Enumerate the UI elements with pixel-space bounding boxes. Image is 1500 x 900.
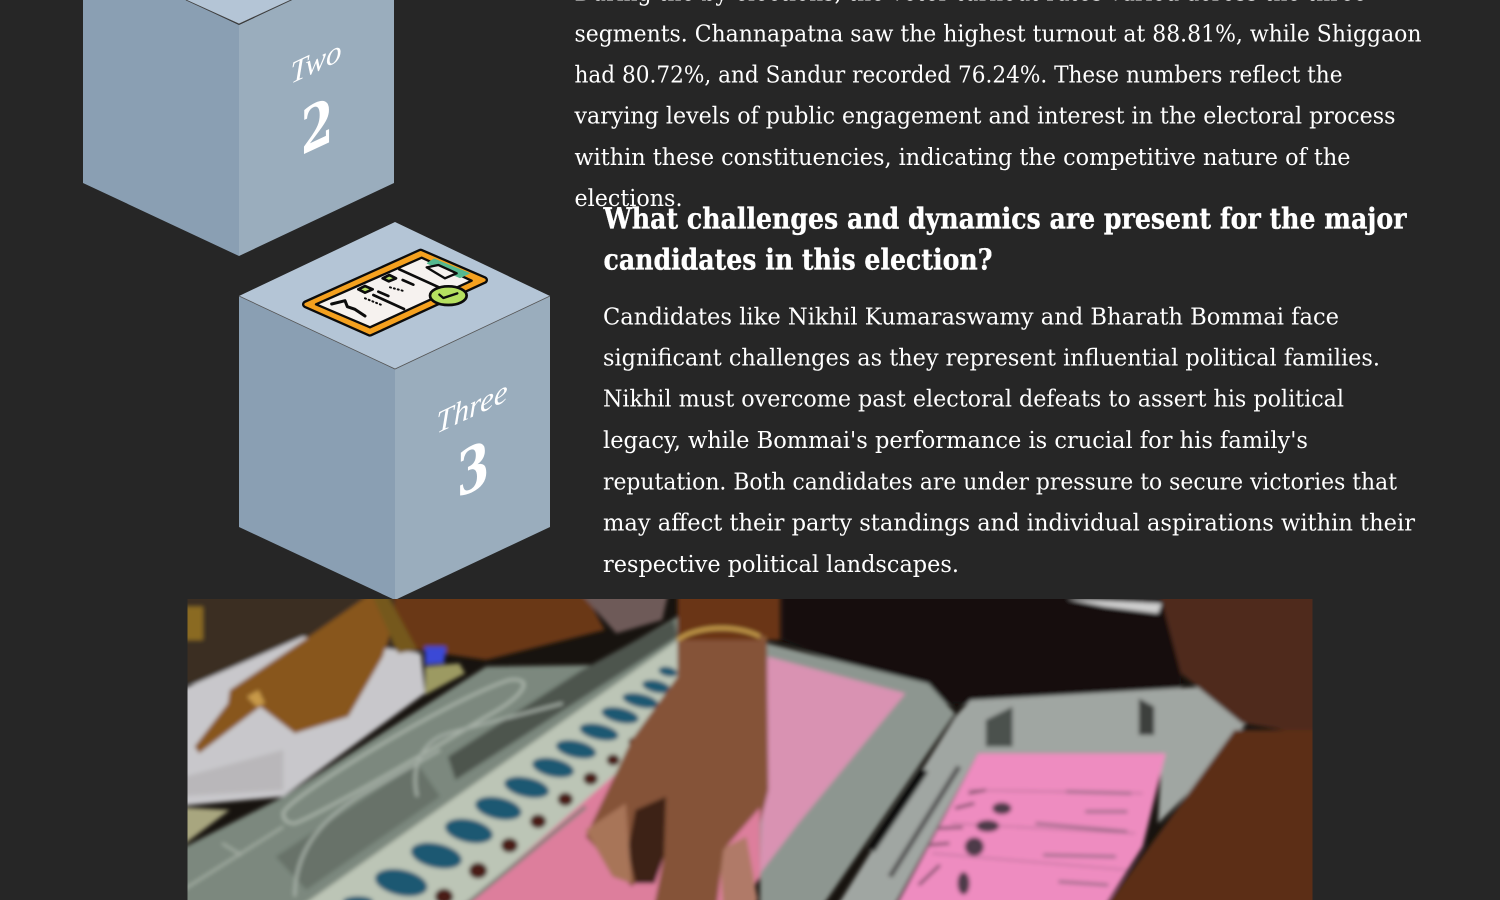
number: 3: 3 [457, 427, 489, 514]
text block: voter turnout: within these constituencies, indicating the competitive nature of the [574, 143, 1350, 171]
heading: challenges and dynamics: candidates in this election? [604, 242, 992, 276]
text block: voter turnout: varying levels of public engagement and interest in the electoral process [574, 102, 1396, 130]
text block: voter turnout [574, 0, 1422, 212]
text block: candidates: reputation. Both candidates are under pressure to secure victories that [603, 468, 1398, 496]
cube three [239, 222, 550, 600]
text block: voter turnout: had 80.72%, and Sandur recorded 76.24%. These numbers reflect the [574, 60, 1342, 88]
icon: clipboard checklist [306, 253, 484, 333]
photo: hands at electronic voting machine [172, 587, 1326, 900]
label: Three: Three [436, 374, 508, 441]
text block: voter turnout: elections. [574, 184, 682, 212]
right part of photo [760, 587, 1326, 900]
cube two [83, 0, 394, 256]
text block: candidates: significant challenges as they represent influential political families. [603, 344, 1380, 372]
text block: candidates [603, 302, 1416, 578]
heading: challenges and dynamics [603, 202, 1407, 276]
text block: candidates: may affect their party standings and individual aspirations within their [603, 508, 1416, 536]
number: 2: 2 [301, 84, 333, 171]
text block: candidates: respective political landscapes. [603, 550, 959, 578]
text block: voter turnout: segments. Channapatna saw the highest turnout at 88.81%, while Shiggaon [574, 20, 1422, 48]
left part of photo [188, 599, 784, 900]
text block: candidates: legacy, while Bommai's performance is crucial for his family's [603, 426, 1308, 454]
text block: candidates: Nikhil must overcome past electoral defeats to assert his political [603, 384, 1344, 412]
heading: challenges and dynamics: What challenges and dynamics are present for the major [603, 202, 1407, 236]
text block: candidates: Candidates like Nikhil Kumaraswamy and Bharath Bommai face [603, 302, 1339, 330]
label: Two: Two [290, 33, 342, 92]
